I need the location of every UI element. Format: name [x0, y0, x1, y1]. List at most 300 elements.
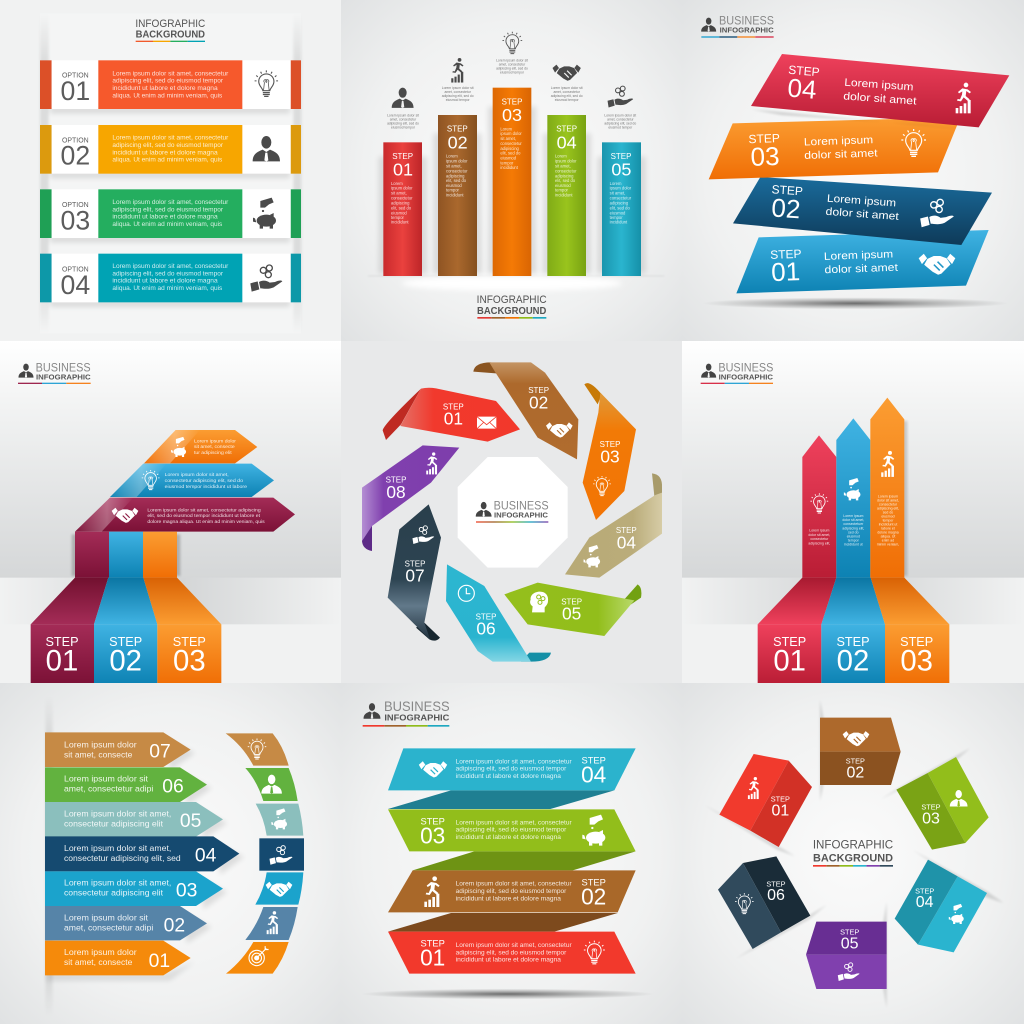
step front panels: STEP	[109, 635, 142, 649]
option 04: aliqua. Ut enim ad minim veniam, quis	[112, 285, 222, 292]
arrow: orange	[870, 398, 904, 578]
step 07: 07	[405, 566, 425, 586]
band 01	[388, 932, 636, 974]
step 01: 01	[444, 409, 463, 429]
arrow: blue	[836, 418, 870, 578]
logo: BUSINESS	[384, 698, 450, 714]
bar 02: eiusmod	[446, 183, 462, 188]
bar 01: Lorem	[391, 181, 403, 186]
captions above bars: amet, consectetur	[444, 90, 472, 94]
bar 05: STEP	[611, 152, 631, 161]
band 03: 03	[420, 822, 445, 848]
bar 01: elit, sed do	[391, 205, 412, 210]
captions above bars: Lorem ipsum dolor sit	[551, 86, 583, 90]
step front panels: STEP	[773, 635, 806, 649]
arrow: maroon: dolore magna aliqua. Ut enim ad minim veniam, quis	[147, 519, 265, 524]
arrow: orange: labore et	[881, 527, 895, 531]
bar 03: Lorem	[500, 126, 513, 131]
bar 01: ipsum dolor	[391, 186, 413, 191]
step 03 block: 03	[922, 810, 940, 827]
ribbon 04	[751, 54, 1009, 131]
step 02 block: 02	[846, 765, 864, 782]
step 05 block	[806, 922, 887, 989]
arrow 01: Lorem ipsum dolor	[64, 948, 137, 957]
bar 02: consectetur	[446, 168, 468, 173]
step 03	[583, 383, 636, 520]
option 02: adipiscing elit, sed do eiusmod tempor	[112, 142, 223, 149]
arrow: blue: Lorem ipsum	[843, 514, 863, 518]
heading: INFOGRAPHIC	[813, 838, 893, 852]
option 02: Lorem ipsum dolor sit amet, consectetur	[112, 135, 228, 142]
option 03: OPTION	[62, 200, 89, 209]
step 01: STEP	[443, 402, 464, 411]
arrow 07: Lorem ipsum dolor	[64, 741, 137, 750]
ribbon 04: STEP	[788, 63, 820, 79]
arrow: maroon: elit, sed do eiusmod tempor incididunt ut labore et	[147, 513, 261, 518]
captions above bars: adipiscing elit, sed do	[604, 121, 636, 125]
heading	[813, 838, 893, 867]
arrow: blue	[110, 464, 274, 497]
step front panels: 02	[837, 645, 869, 678]
step 05 block: STEP	[840, 927, 859, 936]
bar 03: sit amet,	[500, 136, 516, 141]
step 02 block	[820, 718, 901, 785]
option 03: incididunt ut labore et dolore magna	[112, 214, 218, 221]
bar 05: tempor	[610, 215, 623, 220]
step 03 block	[896, 757, 989, 850]
band 03	[388, 809, 636, 851]
arrow: maroon: Lorem ipsum dolor sit amet, consectetur adipiscing	[147, 507, 261, 512]
arrow: blue: sed do	[848, 530, 859, 534]
bar 03: tempor	[500, 160, 514, 165]
captions above bars: adipiscing elit, sed do	[496, 67, 528, 71]
bar 03: incididunt	[500, 165, 519, 170]
panel: slanted ribbons	[682, 0, 1024, 342]
ribbon 04: 04	[786, 72, 818, 105]
captions above bars: eiusmod tempor	[555, 98, 579, 102]
arrow: orange: Lorem ipsum dolor	[194, 438, 237, 443]
arrow: orange: tempor	[883, 519, 894, 523]
step 03: 03	[600, 446, 620, 466]
bar 04: 04	[557, 132, 577, 152]
bar 02: tempor	[446, 188, 460, 193]
logo: INFOGRAPHIC	[36, 372, 91, 381]
captions above bars: eiusmod tempor	[391, 125, 416, 129]
bar 01: incididunt	[391, 220, 409, 225]
step 03: STEP	[600, 440, 620, 449]
bar 03: 03	[502, 105, 522, 125]
step front panels: STEP	[900, 635, 933, 649]
arrow 04: 04	[195, 846, 217, 867]
arrow: orange: Lorem ipsum	[878, 494, 898, 498]
option 04: 04	[61, 270, 90, 300]
band 03: Lorem ipsum dolor sit amet, consectetur	[456, 819, 572, 826]
bar 03: elit, sed do	[500, 151, 521, 156]
arrow 01: sit amet, consecte	[64, 958, 133, 967]
arrow: orange: incididunt ut	[879, 523, 897, 527]
bar 05	[597, 142, 646, 276]
ribbon 01: 01	[771, 256, 801, 287]
arrow shadow	[903, 421, 907, 576]
captions above bars: Lorem ipsum dolor sit	[442, 86, 474, 90]
arrow 02: amet, consectetur adipi	[64, 923, 154, 932]
option 01: incididunt ut labore et dolore magna	[112, 85, 218, 92]
floor ribbons	[31, 578, 221, 624]
bar 04: Lorem	[555, 154, 567, 159]
step front panels: STEP	[173, 635, 206, 649]
bar 05: ipsum dolor	[610, 186, 632, 191]
ribbon 02: STEP	[771, 182, 803, 198]
panel: octagon cycle	[341, 341, 683, 683]
step 06: STEP	[476, 612, 496, 621]
step 01 block	[719, 754, 812, 847]
icon: coins	[608, 86, 633, 107]
captions above bars: eiusmod tempor	[500, 71, 525, 75]
bar 05: 05	[611, 160, 631, 180]
arrow: orange: adipiscing elit,	[877, 507, 899, 511]
bar 04: incididunt	[555, 192, 573, 197]
arrow: blue: incididunt ut	[844, 542, 863, 546]
arrow: red: consectetur	[810, 537, 829, 541]
bar 03: STEP	[502, 97, 522, 106]
logo	[18, 360, 91, 384]
arrow: red: Lorem ipsum	[809, 529, 829, 533]
icon: handshake	[552, 65, 581, 81]
icon: man	[392, 88, 414, 108]
arrow 02: 02	[164, 916, 185, 937]
logo: INFOGRAPHIC	[720, 26, 774, 35]
step 01 block: STEP	[771, 795, 790, 804]
band 02: Lorem ipsum dolor sit amet, consectetur	[456, 881, 572, 888]
arrow: blue: Lorem ipsum dolor sit amet,	[165, 472, 229, 477]
bar 01: tempor	[391, 215, 405, 220]
logo: INFOGRAPHIC	[719, 372, 774, 381]
heading: BACKGROUND	[813, 852, 893, 864]
step 01 block: 01	[771, 802, 789, 819]
bar 04: ipsum dolor	[555, 158, 577, 163]
ground shadow	[361, 989, 654, 999]
option 03: aliqua. Ut enim ad minim veniam, quis	[112, 221, 222, 228]
option 01: aliqua. Ut enim ad minim veniam, quis	[112, 92, 222, 99]
band 03: STEP	[420, 816, 445, 826]
option 02: incididunt ut labore et dolore magna	[112, 149, 218, 156]
arrow: blue: eiusmod tempor incididunt ut labore	[165, 484, 248, 489]
arrow: orange: aliqua. Ut	[881, 535, 895, 539]
arrow 01: 01	[149, 951, 170, 972]
step 05: 05	[562, 604, 581, 624]
option 04: OPTION	[62, 265, 89, 274]
captions above bars: adipiscing elit, sed do	[551, 94, 583, 98]
ribbon 04: dolor sit amet	[843, 90, 917, 108]
arrow: orange: dolore magna	[877, 531, 899, 535]
option 01: Lorem ipsum dolor sit amet, consectetur	[112, 70, 228, 77]
bar 01: STEP	[392, 152, 413, 161]
arrow 04: consectetur adipiscing elit, sed	[64, 854, 181, 863]
step 04 block: STEP	[915, 887, 934, 896]
step 06: 06	[476, 619, 496, 639]
bar 05: consectetur	[610, 196, 632, 201]
option 02	[40, 125, 301, 178]
logo	[701, 14, 774, 38]
arc 06	[245, 768, 298, 801]
bar 03: ipsum dolor	[500, 131, 522, 136]
bar 02: sit amet,	[446, 163, 462, 168]
step front panels	[31, 624, 221, 684]
arc 04	[259, 838, 304, 871]
bar 05: Lorem	[610, 181, 622, 186]
heading: BACKGROUND	[136, 30, 205, 41]
band 04: incididunt ut labore et dolore magna	[456, 773, 562, 780]
band 01: 01	[420, 945, 445, 971]
bar 01: eiusmod	[391, 210, 407, 215]
step front panels: 03	[173, 645, 206, 678]
band 03: incididunt ut labore et dolore magna	[456, 834, 562, 841]
center octagon: INFOGRAPHIC	[494, 510, 549, 519]
step 04 block: 04	[916, 894, 934, 911]
step 08: STEP	[386, 476, 406, 485]
bar 02: elit, sed do	[446, 178, 467, 183]
ribbon 01	[736, 230, 989, 293]
arc 07	[226, 733, 289, 766]
bar 03: consectetur	[500, 141, 522, 146]
panel: step bars	[341, 0, 683, 342]
logo	[363, 698, 450, 727]
arrow 03: consectetur adipiscing elit	[64, 889, 164, 898]
arrow: orange: sed do	[883, 511, 893, 515]
step 06 block: 06	[767, 887, 785, 904]
captions above bars: eiusmod tempor	[446, 98, 470, 102]
arrow 03: Lorem ipsum dolor sit amet,	[64, 879, 171, 888]
bar 03: adipiscing	[500, 146, 520, 151]
arrow: orange: eiusmod	[881, 515, 895, 519]
bar 05: sit amet,	[610, 191, 625, 196]
band 02: incididunt ut labore et dolore magna	[456, 895, 562, 902]
ribbon 01: Lorem ipsum	[824, 248, 894, 263]
arrow 07: 07	[149, 742, 171, 763]
bar 05: elit, sed do	[610, 205, 630, 210]
step 07: STEP	[405, 559, 425, 568]
bar 01: 01	[393, 160, 413, 180]
option 01: 01	[61, 76, 90, 106]
arrow: blue: consectetuer	[843, 522, 864, 526]
captions above bars	[387, 59, 636, 129]
bar 04: tempor	[555, 188, 569, 193]
band 01: adipiscing elit, sed do eiusmod tempor	[456, 949, 566, 956]
option 01: OPTION	[62, 71, 89, 80]
bar 02: ipsum dolor	[446, 158, 468, 163]
option 02: aliqua. Ut enim ad minim veniam, quis	[112, 157, 222, 164]
arrow shadows	[47, 740, 244, 980]
bar 01	[379, 142, 427, 276]
band 02	[388, 870, 636, 912]
arrow 04	[45, 836, 239, 871]
bar 02: 02	[448, 132, 468, 152]
panel: option banners	[0, 0, 342, 342]
bar 03	[488, 88, 536, 276]
step 04: 04	[617, 532, 636, 552]
band 01: Lorem ipsum dolor sit amet, consectetur	[456, 942, 572, 949]
step front panels: 03	[900, 645, 933, 678]
arrow: blue: dolor sit amet,	[842, 518, 864, 522]
step 08	[362, 445, 459, 551]
arrow 02: Lorem ipsum dolor sit	[64, 913, 149, 922]
step 07	[388, 504, 441, 641]
step 02: STEP	[528, 386, 549, 395]
ribbon 03: Lorem ipsum	[804, 134, 874, 149]
heading: INFOGRAPHIC	[477, 294, 547, 306]
heading: INFOGRAPHIC	[135, 18, 206, 30]
option 03: 03	[61, 205, 90, 235]
arc 03	[255, 872, 303, 905]
arrow: blue: tempor	[848, 538, 860, 542]
logo: BUSINESS	[718, 360, 773, 374]
step 06 block	[718, 856, 810, 949]
option 03: Lorem ipsum dolor sit amet, consectetur	[112, 199, 228, 206]
band 01: STEP	[420, 939, 445, 949]
ribbon 01: dolor sit amet	[824, 262, 898, 276]
ribbon 03: STEP	[748, 131, 780, 146]
panel: hexagonal cycle	[682, 683, 1024, 1024]
panel: bent arrows	[0, 341, 342, 684]
option 04: Lorem ipsum dolor sit amet, consectetur	[112, 263, 228, 270]
step 04	[565, 473, 662, 578]
arrow 05	[45, 802, 223, 837]
arrow: orange: tur adipiscing elit	[194, 450, 233, 455]
arrow 02	[45, 906, 207, 940]
arrow: orange: minim veniam,	[877, 543, 899, 547]
step 05	[504, 583, 641, 636]
arrow 05: consectetur adipiscing elit	[64, 819, 164, 828]
arrow 06: 06	[162, 776, 184, 797]
step 02 block: STEP	[846, 756, 865, 765]
bar 02: STEP	[447, 125, 468, 134]
icon: bulb	[502, 32, 522, 54]
step 08: 08	[386, 482, 406, 502]
arrow: orange: consectetur	[879, 503, 898, 507]
arrow: red: adipiscing elit,	[808, 541, 830, 545]
logo: INFOGRAPHIC	[384, 712, 450, 722]
step 06 block: STEP	[766, 879, 786, 888]
arrow: red: dolor sit amet,	[808, 533, 830, 537]
arrow 04: Lorem ipsum dolor sit amet,	[64, 844, 171, 853]
ribbon 02: 02	[770, 192, 801, 224]
step 03 block: STEP	[921, 803, 941, 812]
band 04: adipiscing elit, sed do eiusmod tempor	[456, 766, 566, 773]
bar 02: incididunt	[446, 192, 464, 197]
arrow: orange: dolor sit amet,	[877, 499, 899, 503]
bar 03: eiusmod	[500, 156, 517, 161]
captions above bars: Lorem ipsum dolor sit	[387, 113, 419, 117]
bar 04: adipiscing	[555, 173, 574, 178]
arrow: orange: enim ad	[882, 539, 894, 543]
step 06	[446, 564, 551, 662]
captions above bars: amet, consectetur	[553, 90, 581, 94]
step front panels: STEP	[45, 635, 79, 649]
bar 02: adipiscing	[446, 173, 465, 178]
step front panels: STEP	[836, 635, 870, 649]
center octagon: BUSINESS	[494, 498, 549, 512]
ribbon 02: dolor sit amet	[825, 206, 899, 223]
center octagon	[458, 457, 568, 568]
logo	[701, 360, 774, 384]
arrow 06	[45, 767, 207, 802]
bar 02: Lorem	[446, 154, 458, 159]
bar 05: eiusmod	[610, 210, 626, 215]
band 02: adipiscing elit, sed do eiusmod tempor	[456, 888, 566, 895]
option 04: adipiscing elit, sed do eiusmod tempor	[112, 270, 223, 277]
step 02: 02	[529, 392, 548, 412]
panel: folded zigzag ribbon	[341, 683, 683, 1024]
step 02	[473, 362, 578, 459]
band 03: adipiscing elit, sed do eiusmod tempor	[456, 827, 566, 834]
panel: vertical arrows	[682, 341, 1024, 684]
arrow: orange	[144, 430, 257, 463]
arrow 05: Lorem ipsum dolor sit amet,	[64, 809, 171, 818]
arrow: blue: adipiscing elit,	[842, 526, 864, 530]
bar 04: eiusmod	[555, 183, 571, 188]
bar 01: sit amet,	[391, 191, 407, 196]
bar 02	[433, 115, 482, 276]
arrow: red	[802, 435, 836, 578]
paper slit shadows	[704, 700, 1004, 1008]
band 04: STEP	[581, 755, 606, 765]
heading	[477, 294, 547, 319]
ribbon 03: 03	[750, 141, 780, 172]
bar 04	[543, 115, 591, 276]
band 02: STEP	[581, 878, 606, 888]
arrow 06: Lorem ipsum dolor sit	[64, 775, 149, 784]
bar 04: sit amet,	[555, 163, 571, 168]
ribbon 02	[733, 177, 992, 245]
band 04: Lorem ipsum dolor sit amet, consectetur	[456, 758, 572, 765]
option 01	[40, 60, 301, 113]
logo: BUSINESS	[36, 360, 91, 374]
arrow 03: 03	[176, 880, 197, 901]
heading	[135, 18, 206, 42]
step 04 block	[895, 860, 987, 952]
arc 02	[245, 907, 298, 940]
step 01	[383, 388, 520, 442]
captions above bars: amet, consectetur	[390, 117, 417, 121]
captions above bars: adipiscing elit, sed do	[387, 121, 419, 125]
band 01: incididunt ut labore et dolore magna	[456, 957, 562, 964]
arrow list	[45, 732, 244, 980]
arrow: maroon	[75, 498, 295, 532]
captions above bars: adipiscing elit, sed do	[442, 94, 474, 98]
step 05 block: 05	[841, 936, 859, 953]
captions above bars: Lorem ipsum dolor sit	[496, 59, 528, 63]
arrow 03	[45, 871, 223, 906]
logo: BUSINESS	[719, 14, 774, 28]
step 05: STEP	[561, 597, 582, 606]
step front panels: 01	[773, 645, 806, 678]
band 04	[388, 748, 636, 790]
captions above bars: eiusmod tempor	[608, 125, 633, 129]
option 03: adipiscing elit, sed do eiusmod tempor	[112, 206, 223, 213]
option 01: adipiscing elit, sed do eiusmod tempor	[112, 78, 223, 85]
arrow: blue: eiusmod	[847, 534, 860, 538]
option 04: incididunt ut labore et dolore magna	[112, 278, 218, 285]
arrow 07: sit amet, consecte	[64, 751, 133, 760]
captions above bars: amet, consectetur	[499, 63, 526, 67]
arrow 07	[45, 732, 191, 767]
arrow 01	[45, 941, 191, 975]
bar 05: incididunt	[610, 220, 628, 225]
band 02: 02	[581, 884, 606, 910]
ribbon 01: STEP	[770, 247, 802, 262]
heading: BACKGROUND	[477, 306, 546, 317]
arrow: blue: consectetur adipiscing elit, sed do	[165, 478, 244, 483]
